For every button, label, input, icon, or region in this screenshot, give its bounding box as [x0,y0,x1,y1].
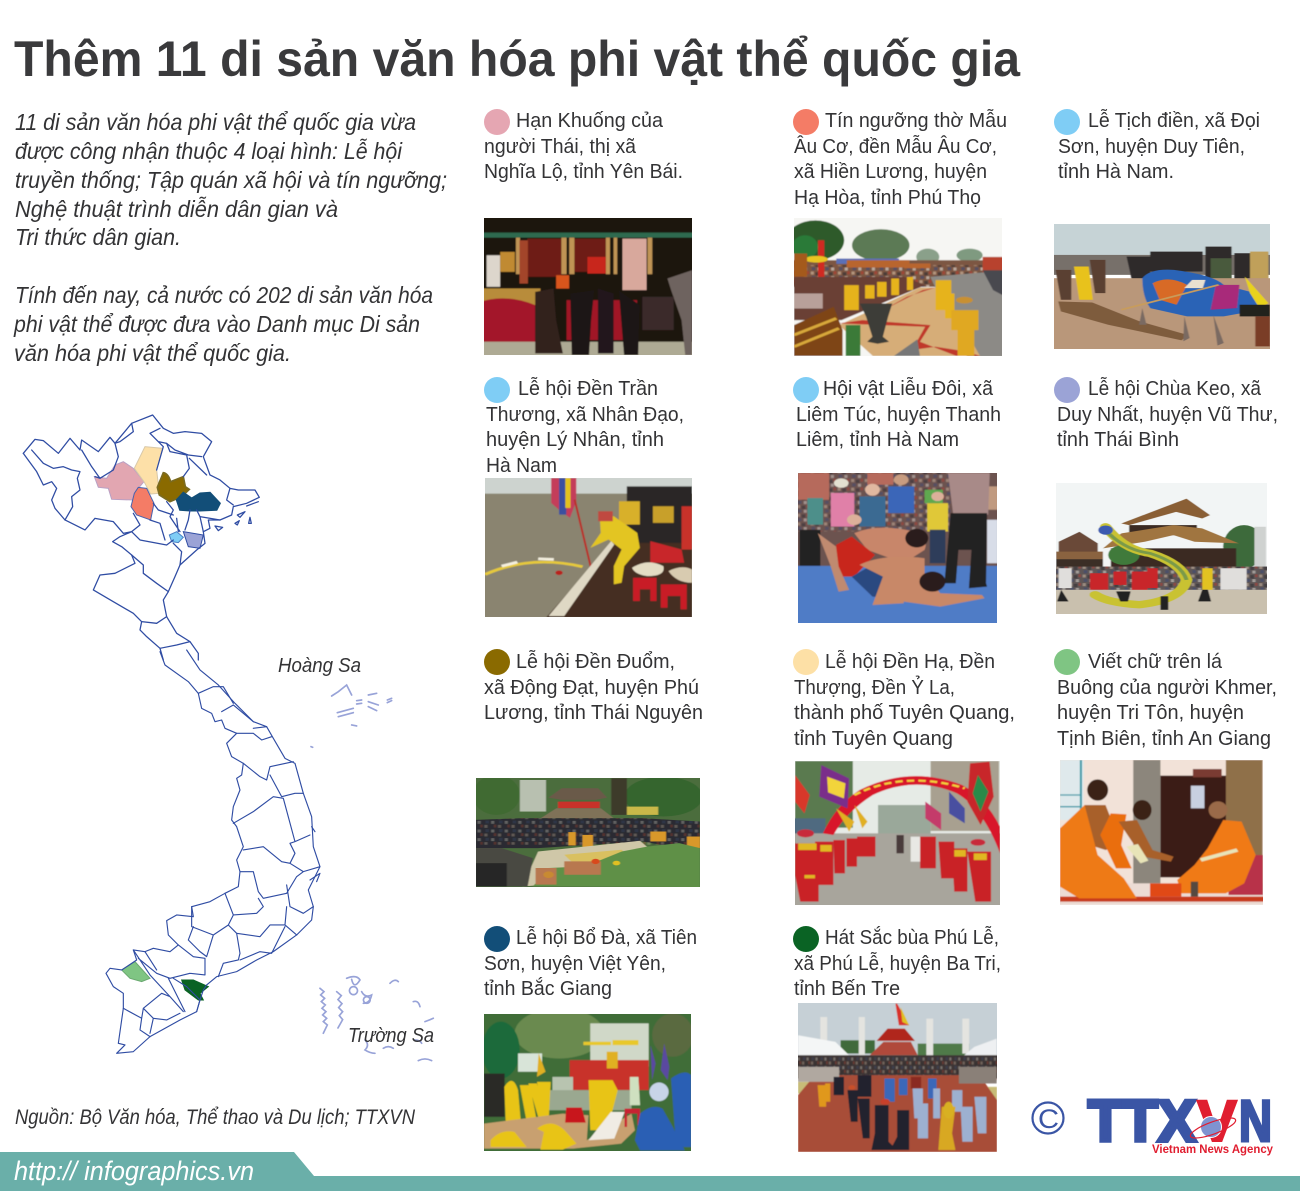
photo: Hát Sắc bùa [798,1003,997,1152]
item text: Tịnh Biên, tỉnh An Giang [1057,728,1271,750]
item text: Liêm, tỉnh Hà Nam [796,429,959,451]
photo: sư Khmer viết chữ [1060,760,1263,905]
photo: lễ hội Đền Hạ [795,761,1000,905]
item text: tỉnh Bắc Giang [484,977,612,1000]
tagline: Vietnam News Agency [1152,1142,1273,1156]
photo: Hội vật Liễu Đôi [798,473,997,623]
item text: xã Hiền Lương, huyện [794,161,987,183]
marker dot [793,377,819,403]
item text: Âu Cơ, đền Mẫu Âu Cơ, [794,135,997,158]
item text: Sơn, huyện Duy Tiên, [1058,136,1245,158]
marker dot [484,109,510,135]
item text: Lễ Tịch điền, xã Đọi [1088,109,1260,132]
marker dot [1054,377,1080,403]
logo wordmark: TTX [1088,1089,1196,1154]
item text [1057,377,1278,451]
map: northern provinces [23,415,259,660]
label: Trường Sa: Trường Sa [348,1025,434,1047]
item text: xã Phú Lễ, huyện Ba Tri, [794,952,1001,975]
item text [484,110,683,183]
item text: Nghĩa Lộ, tỉnh Yên Bái. [484,161,683,183]
marker dot [484,377,510,403]
photo: Hạn Khuống [484,218,692,355]
item text: tỉnh Hà Nam. [1058,161,1174,183]
source note: Nguồn: Bộ Văn hóa, Thể thao và Du lịch; TTXVN [15,1106,416,1129]
item text: người Thái, thị xã [484,136,637,158]
icon: globe with orbit [1188,1114,1238,1142]
item text: Liêm Túc, huyện Thanh [796,404,1001,426]
item text: tỉnh Thái Bình [1057,429,1179,451]
intro text block: Tính đến nay, cả nước có 202 di sản văn hóa [15,282,433,308]
item text: Hát Sắc bùa Phú Lễ, [825,926,999,949]
intro text block [13,109,447,366]
item: Hát Sắc bùa Phú Lễ [793,926,1001,1152]
photo: chùa Keo [1056,483,1267,614]
photo: Đền Đuổm [476,778,700,887]
item: Viết chữ trên lá Buông [1054,649,1277,905]
footer URL: http:// infographics.vn [14,1156,254,1186]
item text [1058,109,1260,183]
item: Lễ hội Đền Hạ, Đền Thượng, Đền Ỷ La [791,649,1015,907]
item text: xã Động Đạt, huyện Phú [484,677,699,699]
item: Lễ hội Chùa Keo [1053,377,1278,615]
item text [1057,651,1277,750]
marker dot [484,649,510,675]
item: Lễ Tịch điền [1050,109,1274,350]
intro text block: truyền thống; Tập quán xã hội và tín ngưỡng; [15,167,447,193]
item text [794,109,1007,209]
item text: Hội vật Liễu Đôi, xã [823,377,994,400]
item text: Thương, xã Nhân Đạo, [486,404,684,426]
item text: thành phố Tuyên Quang, [794,702,1015,724]
map of Vietnam [23,415,433,1061]
item text: Lễ hội Chùa Keo, xã [1088,377,1262,400]
item text: Tín ngưỡng thờ Mẫu [825,109,1007,132]
footer bar [0,1152,1300,1191]
marker dot [793,109,819,135]
item: Hạn Khuống [480,109,700,358]
item text: Hà Nam [486,455,557,477]
intro text block: văn hóa phi vật thể quốc gia. [14,340,291,366]
item text [796,377,1001,451]
islands: Hoàng Sa [311,685,392,747]
marker dot [793,926,819,952]
item text: Hạ Hòa, tỉnh Phú Thọ [794,187,981,209]
item text: Lễ hội Bổ Đà, xã Tiên [516,926,697,949]
photo: lễ Tịch điền [1054,224,1270,349]
intro text block: Tri thức dân gian. [15,224,181,250]
logo wordmark [1088,1089,1272,1154]
photo: lễ hội Bổ Đà [484,1014,691,1151]
logo wordmark: V [1197,1089,1237,1154]
item text: Viết chữ trên lá [1088,651,1223,673]
label: Hoàng Sa: Hoàng Sa [278,655,361,677]
logo wordmark: N [1239,1089,1272,1154]
photo: Đền Trần Thương [485,478,692,617]
marker dot [793,649,819,675]
photo: lễ rước Âu Cơ [794,218,1002,356]
item text: huyện Lý Nhân, tỉnh [486,429,664,451]
icon: copyright [1032,1102,1064,1134]
intro text block: phi vật thể được đưa vào Danh mục Di sản [13,311,420,337]
item: Hội vật Liễu Đôi [793,377,1001,624]
intro text block: Nghệ thuật trình diễn dân gian và [15,195,338,222]
map: central and southern provinces [106,650,433,1061]
islands: Trường Sa [320,977,433,1061]
item text: Buông của người Khmer, [1057,677,1277,699]
item text: Duy Nhất, huyện Vũ Thư, [1057,404,1278,426]
item: Tín ngưỡng thờ Mẫu Âu Cơ [787,109,1009,358]
item text: tỉnh Bến Tre [794,978,900,1000]
item: Lễ hội Đền Trần Thương [481,377,700,618]
marker dot [484,926,510,952]
item text: Sơn, huyện Việt Yên, [484,953,666,975]
title: Thêm 11 di sản văn hóa phi vật thể quốc gia [14,31,1021,87]
item text [486,377,684,477]
item text [484,650,703,724]
item text [484,926,697,1000]
intro text block: được công nhận thuộc 4 loại hình: Lễ hội [15,137,403,164]
item text: tỉnh Tuyên Quang [794,728,953,750]
item text: Lễ hội Đền Đuổm, [516,650,675,673]
marker dot [1054,109,1080,135]
item text: Lễ hội Đền Hạ, Đền [825,650,995,673]
marker dot [1054,649,1080,675]
item text [794,650,1015,750]
item text [794,926,1001,1000]
intro text block: 11 di sản văn hóa phi vật thể quốc gia vừa [15,109,416,135]
item text: huyện Tri Tôn, huyện [1057,702,1244,724]
icon: copyright: C [1038,1104,1059,1134]
item: Lễ hội Bổ Đà [482,926,697,1154]
item text: Lương, tỉnh Thái Nguyên [484,702,703,724]
item: Lễ hội Đền Đuổm [473,649,703,890]
logo: TTXVN [1032,1089,1273,1156]
item text: Hạn Khuống của [516,110,664,132]
item text: Thượng, Đền Ỷ La, [794,676,955,699]
item text: Lễ hội Đền Trần [518,377,658,400]
